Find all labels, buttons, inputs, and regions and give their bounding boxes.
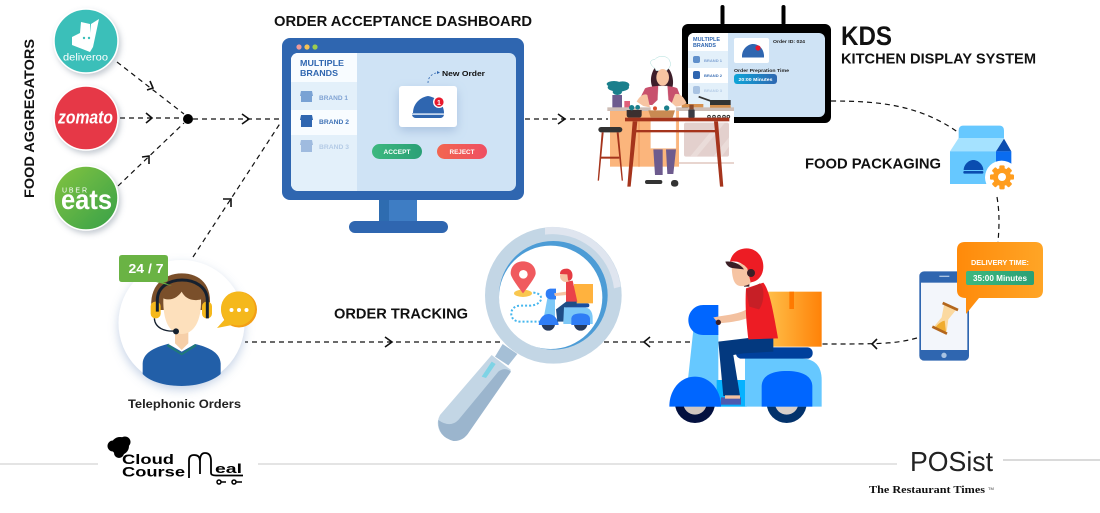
text: the restaurant times: The Restaurant Times — [869, 485, 985, 496]
sidebar: multiple brands — [300, 58, 349, 152]
plant — [612, 95, 622, 108]
sidebar: multiple brands: BRAND 3 — [319, 144, 349, 151]
chef — [651, 68, 673, 89]
callout: delivery time: DELIVERY TIME: — [971, 260, 1029, 267]
logo: zomato — [54, 86, 118, 150]
sidebar: multiple brands: BRAND 2 — [319, 119, 349, 126]
kitchen display screen: MULTIPLE — [693, 37, 721, 43]
stool — [598, 127, 622, 132]
logo: cloud course meal: Course — [122, 464, 185, 480]
sidebar: multiple brands: BRAND 1 — [319, 95, 348, 102]
button: accept — [372, 144, 422, 159]
heading: KDS: KDS — [841, 21, 892, 51]
illustration: delivery scooter — [669, 248, 822, 423]
kitchen display screen: Order Prepration Time — [734, 68, 789, 74]
logo: uber eats: eats — [61, 184, 112, 215]
footer lines — [0, 460, 1100, 464]
button: reject: REJECT — [450, 149, 475, 156]
callout: delivery time — [957, 242, 1043, 314]
illustration: chef in kitchen — [598, 56, 734, 187]
logo: zomato: zomato — [57, 108, 113, 128]
new order label: New Order — [442, 69, 485, 78]
card: new order cloche — [399, 86, 457, 127]
logo: cloud course meal: Cloud — [122, 451, 174, 467]
card: new order cloche: 1 — [437, 100, 441, 107]
kitchen display screen: BRANDS — [693, 43, 717, 49]
junction dot — [183, 114, 193, 124]
kitchen display screen: BRAND 2 — [704, 74, 722, 78]
logo: cloud course meal: eal — [215, 461, 242, 476]
label: order tracking: ORDER TRACKING — [334, 306, 468, 322]
sidebar: multiple brands: MULTIPLE — [300, 58, 344, 68]
logo: deliveroo — [54, 9, 118, 73]
kitchen display screen: BRAND 1 — [704, 59, 722, 63]
illustration: magnifying glass with tracking — [438, 227, 622, 441]
logo: POSist: POSist — [910, 446, 993, 477]
illustration: telephone agent — [118, 260, 244, 386]
logo: cloud course meal — [108, 436, 243, 484]
monitor: order acceptance dashboard — [282, 38, 524, 233]
callout: delivery time: 35:00 Minutes — [973, 274, 1028, 283]
label: food aggregators: FOOD AGGREGATORS — [21, 39, 37, 198]
sidebar: multiple brands: BRANDS — [300, 68, 338, 78]
logo: uber eats — [54, 166, 118, 230]
label: telephonic orders: Telephonic Orders — [128, 397, 241, 411]
new order label — [428, 69, 485, 83]
table items — [627, 110, 642, 118]
map pin — [514, 290, 532, 297]
kitchen display screen: 20:00 Minutes — [738, 77, 773, 83]
small scooter — [574, 284, 593, 303]
pan — [699, 97, 712, 101]
table — [625, 118, 729, 121]
tag: 24/7: 24 / 7 — [128, 262, 164, 276]
button: reject — [437, 144, 487, 159]
kitchen display screen: Order ID: 024 — [773, 39, 805, 45]
tag: 24/7 — [119, 255, 172, 286]
label: food packaging: FOOD PACKAGING — [805, 156, 941, 172]
kitchen display screen: BRAND 3 — [704, 89, 722, 93]
icon: phone with hourglass — [919, 271, 969, 361]
heading: order acceptance dashboard: ORDER ACCEPTANCE DASHBOARD — [274, 13, 532, 30]
speech bubble — [217, 292, 257, 328]
subheading: kitchen display system: KITCHEN DISPLAY SYSTEM — [841, 50, 1036, 68]
kitchen display screen — [682, 5, 831, 123]
flow arrows — [117, 62, 999, 349]
icon: food package with gear — [950, 126, 1018, 194]
button: accept: ACCEPT — [384, 149, 411, 156]
logo: uber eats: UBER — [62, 188, 87, 194]
trademark: TM — [988, 486, 994, 491]
logo: deliveroo: deliveroo — [63, 52, 108, 64]
